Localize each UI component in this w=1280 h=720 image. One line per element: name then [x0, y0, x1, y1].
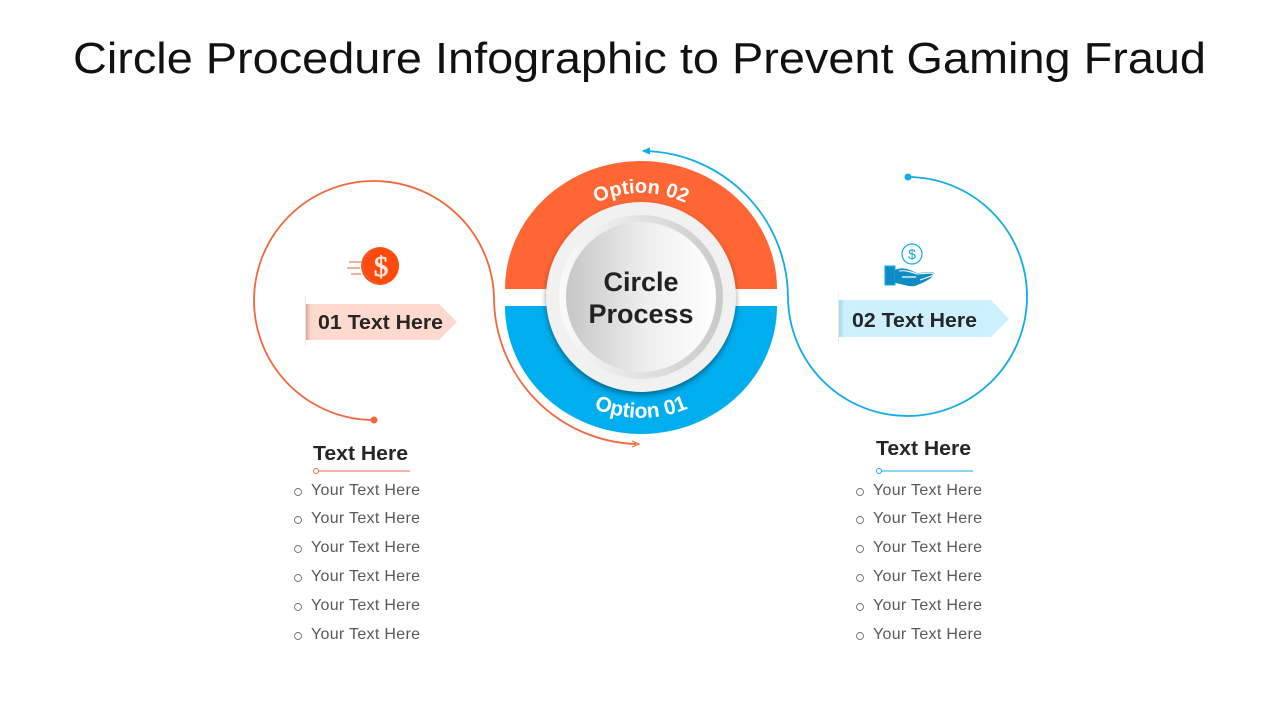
- center text: Circle: [603, 267, 679, 297]
- center disc: [546, 202, 736, 392]
- bullet list: Your Text Here: [311, 597, 420, 614]
- panel: left text list: [294, 443, 420, 643]
- bullet list: [856, 482, 982, 643]
- title: Circle Procedure Infographic to Prevent Gaming Fraud: [73, 34, 1206, 83]
- right blue circular arrow: [643, 148, 1027, 416]
- bullet list: [294, 482, 420, 643]
- left orange circular arrow: [254, 181, 639, 447]
- center text: Process: [588, 299, 694, 329]
- bullet list: Your Text Here: [311, 482, 420, 499]
- bullet list: Your Text Here: [311, 510, 420, 527]
- icon: hand with coin: $: [908, 246, 916, 262]
- heading underline: [876, 468, 973, 474]
- bullet list: Your Text Here: [311, 568, 420, 585]
- arrow label: 01 text here: [305, 296, 457, 346]
- bullet list: Your Text Here: [873, 597, 982, 614]
- bullet list: Your Text Here: [873, 568, 982, 585]
- arrow label: 01 text here: 01 Text Here: [318, 312, 443, 334]
- label: option 01: Option 01: [596, 396, 688, 419]
- bullet list: Your Text Here: [873, 539, 982, 556]
- heading: Text Here: [876, 438, 971, 460]
- arrow label: 02 text here: [838, 292, 1009, 344]
- arrow label: 02 text here: 02 Text Here: [852, 310, 977, 332]
- ring segment: option 01: [505, 306, 777, 434]
- icon: hand with coin: [885, 244, 934, 286]
- bullet list: Your Text Here: [311, 626, 420, 643]
- bullet list: Your Text Here: [873, 510, 982, 527]
- icon: dollar coin: [347, 247, 399, 285]
- bullet list: Your Text Here: [311, 539, 420, 556]
- panel: right text list: [856, 438, 982, 643]
- bullet list: Your Text Here: [873, 626, 982, 643]
- label: option 02: Option 02: [594, 178, 689, 203]
- heading: Text Here: [313, 443, 408, 465]
- panel: circle process ring: [505, 161, 777, 434]
- icon: dollar coin: $: [374, 251, 388, 283]
- ring segment: option 02: [505, 161, 777, 289]
- heading underline: [314, 468, 410, 474]
- bullet list: Your Text Here: [873, 482, 982, 499]
